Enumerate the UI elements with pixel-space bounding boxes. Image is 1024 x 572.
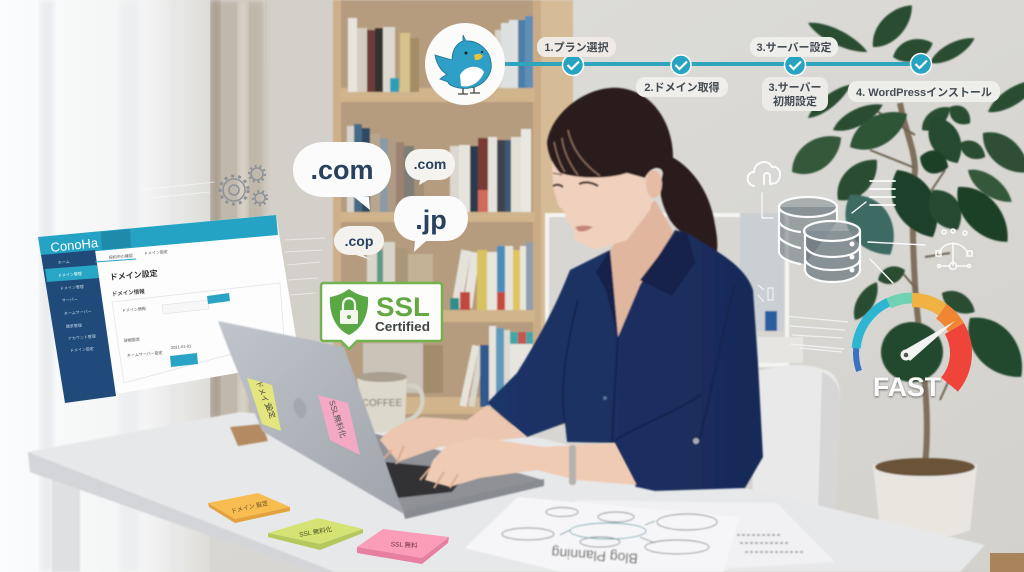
dashboard panel: ドメイン情報 [111, 287, 146, 298]
form frame [112, 283, 284, 383]
step label 4: 4. WordPressインストール [856, 86, 992, 99]
dashboard panel: ドメイン設定 [144, 248, 168, 256]
bangs highlight [554, 130, 600, 176]
orange note: ドメイン 設定 [230, 499, 269, 515]
speech bubble: .cop [334, 226, 384, 260]
sticky notes on desk [208, 493, 449, 564]
bookshelf [333, 0, 573, 425]
hands and forearms [380, 405, 637, 488]
brown notebook on desk [230, 424, 268, 446]
step label 3 bottom: 3.サーバー [768, 81, 822, 94]
step label 1 [537, 37, 616, 57]
papers on desk [465, 497, 835, 572]
ear [646, 170, 662, 198]
gauge label: FAST [873, 372, 941, 402]
speech bubble: .com large [293, 142, 391, 210]
wristwatch [569, 445, 576, 485]
books fourth row [363, 326, 533, 407]
green note: SSL 無料化 [298, 524, 333, 539]
connector lines [852, 181, 925, 283]
dashboard panel: 2021-01-01 [171, 343, 192, 350]
light screen behind woman [547, 213, 803, 365]
step label 2: 2.ドメイン取得 [644, 80, 720, 94]
speech bubble: .com small [405, 149, 455, 185]
step check 4 [910, 54, 932, 74]
pink note: SSL 無料 [390, 539, 418, 550]
papers on desk: Blog Planning [551, 545, 638, 567]
step label 3 bottom: 初期設定 [773, 94, 817, 108]
orange note [208, 493, 290, 523]
sticky note: domain settings: ドメイン [254, 380, 273, 411]
logo: ConoHa [50, 235, 100, 255]
sidebar menu: アカウント管理 [68, 333, 96, 341]
SSL certified badge: SSL [376, 292, 430, 322]
form input [162, 300, 209, 314]
step label 3 bottom [762, 77, 828, 111]
icon: network [936, 229, 972, 270]
SSL certified badge [321, 283, 442, 349]
panel base [38, 215, 300, 403]
green note [268, 518, 363, 550]
sidebar menu [58, 259, 96, 353]
mascot: bird [425, 23, 505, 105]
sidebar menu: サーバー [62, 297, 78, 303]
coffee mug [357, 372, 423, 433]
laptop lid [218, 321, 404, 514]
floating data lines around dashboard [140, 182, 325, 295]
step label 1: 1.プラン選択 [544, 40, 609, 54]
icon: shield with lock [330, 289, 368, 335]
sidebar menu: ホーム [58, 259, 70, 265]
speech bubble: .com large: .com [310, 155, 374, 185]
pink note [357, 529, 449, 564]
step check 1 [562, 54, 584, 76]
server and network icons [748, 162, 972, 283]
save button [170, 353, 198, 367]
eyes and mouth [553, 182, 598, 187]
sticky note: domain settings: 設定 [264, 403, 277, 420]
sidebar menu: ドメイン設定 [70, 345, 94, 353]
step label 3 top: 3.サーバー設定 [756, 41, 832, 54]
sidebar menu: ドメイン管理 [58, 270, 82, 278]
speech bubble: .jp [394, 196, 468, 252]
step label 4 [848, 81, 1000, 102]
desk [28, 412, 985, 572]
needle [900, 321, 955, 361]
sidebar menu: ドメイン管理 [60, 283, 84, 291]
coffee mug: COFFEE [362, 398, 403, 409]
sidebar menu: ネームサーバー [64, 308, 92, 316]
speech bubble: .cop: .cop [345, 233, 373, 249]
plant [784, 0, 1024, 539]
sidebar menu: 請求管理 [66, 322, 82, 329]
step label 3 top [750, 37, 838, 57]
SSL certified badge: Certified [375, 319, 430, 334]
icon: cloud [748, 162, 780, 218]
books third row [367, 242, 533, 310]
step check 2 [671, 55, 691, 75]
icon: database front [804, 221, 860, 282]
dashboard panel: ネームサーバー設定 [127, 349, 163, 358]
books second row [347, 124, 531, 212]
hair [547, 88, 673, 178]
progress timeline [425, 23, 1000, 111]
form labels: ドメイン情報 [122, 305, 146, 313]
sticky note: SSL on laptop [318, 395, 360, 455]
speech bubble: .jp: .jp [415, 205, 447, 235]
face [552, 130, 655, 250]
step label 2 [636, 77, 728, 97]
sidebar [41, 250, 116, 403]
timeline line [505, 62, 925, 66]
active item [45, 265, 99, 282]
sticky note: SSL on laptop: SSL無料化 [327, 399, 349, 439]
chair [752, 365, 840, 512]
laptop base [368, 432, 544, 519]
header tab [101, 229, 131, 250]
sticky note: domain settings [247, 378, 281, 431]
collar [596, 232, 695, 337]
books top row [348, 16, 533, 92]
header strip [38, 215, 278, 256]
shirt [487, 230, 763, 491]
panel heading: ドメイン設定 [109, 269, 158, 282]
sleeve folds [563, 285, 735, 487]
woman [487, 88, 763, 491]
dashboard panel: 詳細設定 [124, 336, 140, 343]
icon: database back [779, 197, 837, 264]
neck and chest [610, 200, 677, 337]
icon: gears [220, 166, 267, 205]
small floating icons and data lines near screen [758, 285, 848, 352]
step check 3 [784, 54, 806, 76]
ponytail [660, 155, 717, 256]
speed gauge [856, 298, 961, 402]
speech bubble: .com small: .com [414, 156, 446, 172]
dashboard panel [38, 215, 300, 403]
tabs: 契約中の確認 [109, 252, 133, 260]
form button [207, 293, 230, 304]
